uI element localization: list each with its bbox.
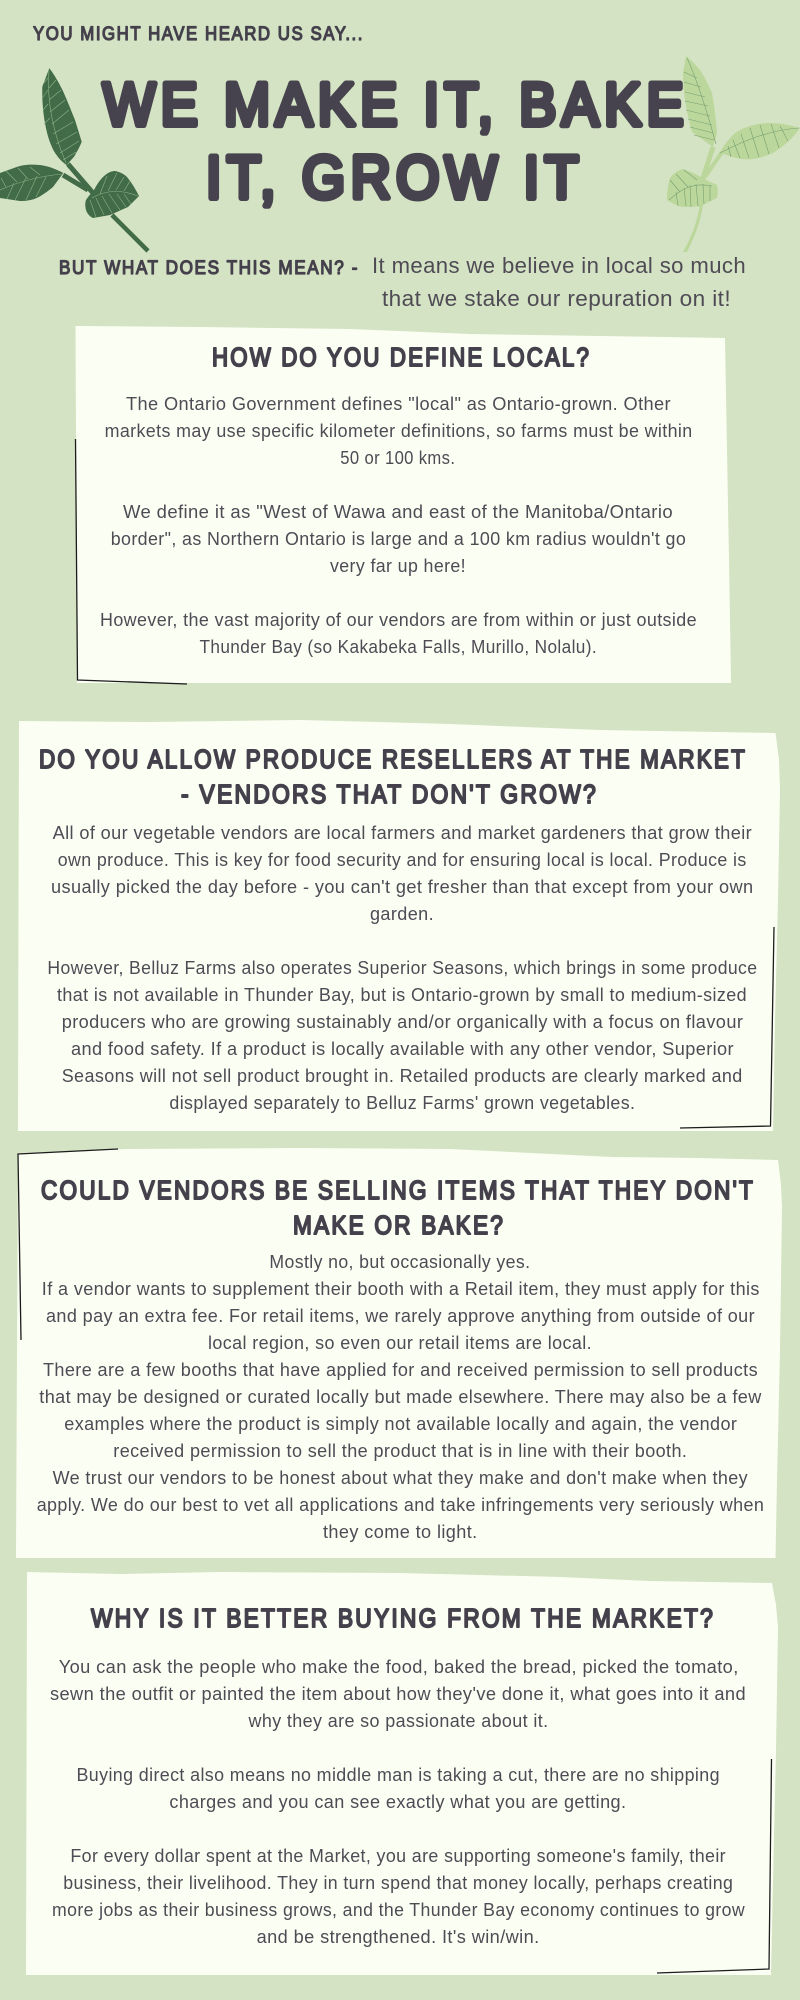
- corner accent line: [76, 439, 187, 684]
- body text: [100, 393, 697, 657]
- body text: more jobs as their business grows, and the Thunder Bay economy continues to grow: [52, 1899, 745, 1920]
- subheading question: BUT WHAT DOES THIS MEAN? -: [59, 257, 359, 279]
- body text: that may be designed or curated locally but made elsewhere. There may also be a few: [39, 1386, 762, 1407]
- body text: very far up here!: [330, 555, 466, 576]
- body text: producers who are growing sustainably and/or organically with a focus on flavour: [62, 1011, 743, 1032]
- heading: MAKE OR BAKE?: [293, 1210, 505, 1240]
- body text: [37, 1251, 764, 1542]
- body text: that is not available in Thunder Bay, but is Ontario-grown by small to medium-sized: [57, 984, 747, 1005]
- body text: and be strengthened. It's win/win.: [257, 1926, 540, 1947]
- body text: [50, 1656, 746, 1947]
- body text: garden.: [370, 903, 434, 924]
- corner accent line: [680, 927, 774, 1128]
- body text: usually picked the day before - you can't get fresher than that except from your own: [51, 876, 754, 897]
- icon: dark green plant left: [0, 68, 148, 251]
- body text: markets may use specific kilometer definitions, so farms must be within: [105, 420, 693, 441]
- title: WE MAKE IT, BAKE: [103, 71, 689, 138]
- body text: and food safety. If a product is locally available with any other vendor, Superior: [71, 1038, 734, 1059]
- body text: business, their livelihood. They in turn spend that money locally, perhaps creating: [63, 1872, 733, 1893]
- subheading answer: that we stake our repuration on it!: [382, 286, 731, 311]
- corner accent line: [657, 1759, 772, 1973]
- body text: However, Belluz Farms also operates Superior Seasons, which brings in some produce: [47, 957, 757, 978]
- body text: received permission to sell the product that is in line with their booth.: [113, 1440, 687, 1461]
- body text: You can ask the people who make the food, baked the bread, picked the tomato,: [59, 1656, 739, 1677]
- body text: For every dollar spent at the Market, you are supporting someone's family, their: [70, 1845, 726, 1866]
- panel: why buy from the market: [26, 1572, 778, 1975]
- body text: We trust our vendors to be honest about what they make and don't make when they: [53, 1467, 748, 1488]
- title: [103, 71, 689, 211]
- subheading answer: [372, 253, 746, 311]
- panel: how do you define local: [76, 326, 731, 684]
- body text: All of our vegetable vendors are local farmers and market gardeners that grow their: [53, 822, 752, 843]
- body text: they come to light.: [323, 1521, 478, 1542]
- body text: and pay an extra fee. For retail items, we rarely approve anything from outside of our: [46, 1305, 755, 1326]
- intro line: YOU MIGHT HAVE HEARD US SAY...: [33, 23, 364, 45]
- body text: sewn the outfit or painted the item about how they've done it, what goes into it and: [50, 1683, 746, 1704]
- body text: However, the vast majority of our vendors are from within or just outside: [100, 609, 697, 630]
- subheading answer: It means we believe in local so much: [372, 253, 746, 278]
- body text: There are a few booths that have applied for and received permission to sell products: [43, 1359, 758, 1380]
- body text: examples where the product is simply not available locally and again, the vendor: [64, 1413, 737, 1434]
- body text: The Ontario Government defines "local" as Ontario-grown. Other: [126, 393, 671, 414]
- body text: Buying direct also means no middle man is taking a cut, there are no shipping: [76, 1764, 720, 1785]
- body text: local region, so even our retail items are local.: [208, 1332, 592, 1353]
- body text: We define it as "West of Wawa and east of the Manitoba/Ontario: [123, 501, 673, 522]
- body text: Thunder Bay (so Kakabeka Falls, Murillo, Nolalu).: [200, 636, 597, 657]
- body text: border", as Northern Ontario is large and a 100 km radius wouldn't go: [111, 528, 686, 549]
- body text: [47, 822, 757, 1113]
- corner accent line: [18, 1149, 118, 1340]
- heading: [39, 744, 747, 809]
- body text: apply. We do our best to vet all applications and take infringements very seriously when: [37, 1494, 764, 1515]
- heading: HOW DO YOU DEFINE LOCAL?: [212, 342, 591, 372]
- body text: If a vendor wants to supplement their booth with a Retail item, they must apply for this: [42, 1278, 760, 1299]
- body text: charges and you can see exactly what you are getting.: [169, 1791, 626, 1812]
- body text: Seasons will not sell product brought in. Retailed products are clearly marked and: [62, 1065, 743, 1086]
- panel: vendors selling items: [16, 1148, 782, 1558]
- body text: own produce. This is key for food security and for ensuring local is local. Produce is: [58, 849, 747, 870]
- body text: displayed separately to Belluz Farms' grown vegetables.: [169, 1092, 635, 1113]
- icon: light green plant right: [667, 56, 800, 252]
- heading: [41, 1175, 755, 1240]
- body text: why they are so passionate about it.: [248, 1710, 548, 1731]
- title: IT, GROW IT: [206, 144, 584, 211]
- body text: Mostly no, but occasionally yes.: [269, 1251, 530, 1272]
- body text: 50 or 100 kms.: [340, 447, 455, 468]
- heading: - VENDORS THAT DON'T GROW?: [181, 779, 598, 809]
- panel: produce resellers: [18, 720, 780, 1131]
- heading: WHY IS IT BETTER BUYING FROM THE MARKET?: [91, 1603, 715, 1633]
